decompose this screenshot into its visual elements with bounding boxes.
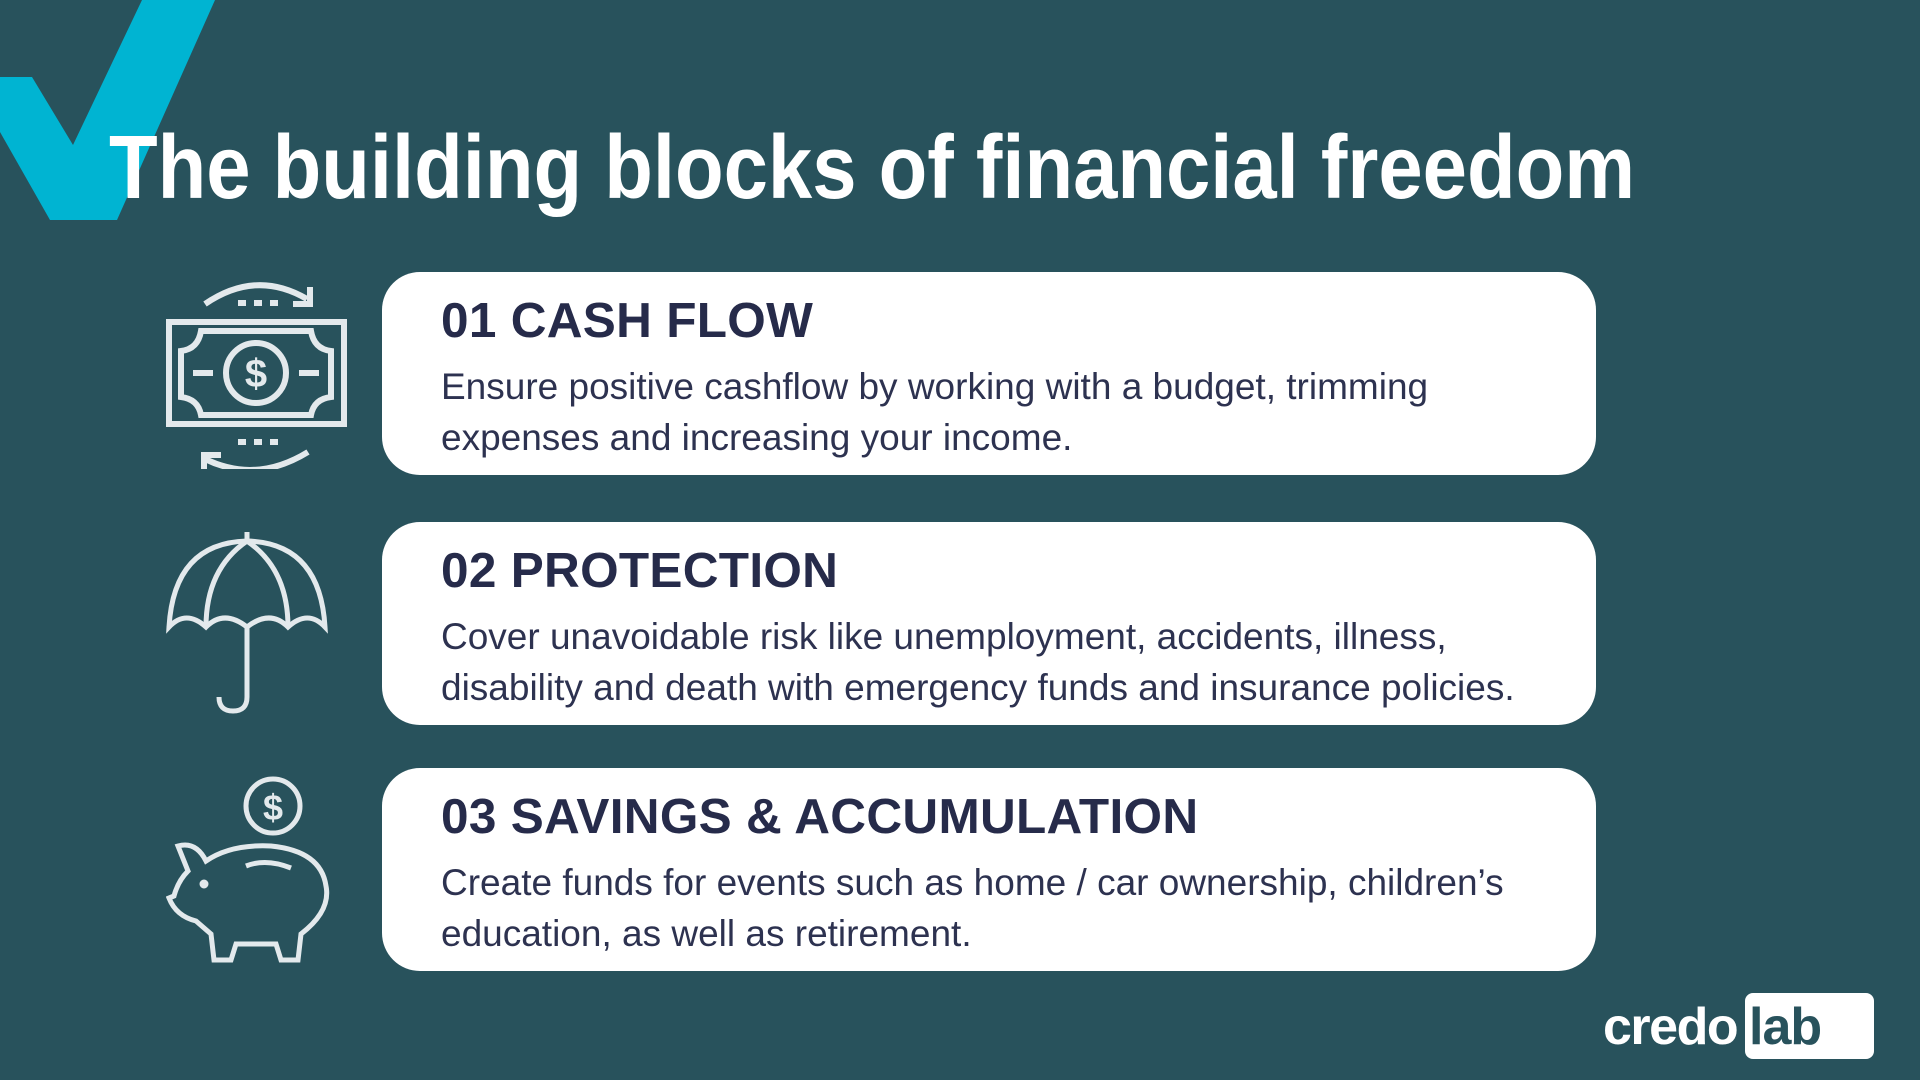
icon: cash flow: $ <box>245 352 267 396</box>
panel: savings <box>382 768 1596 971</box>
text: protection description: disability and death with emergency funds and insurance policies. <box>441 667 1515 708</box>
text: savings description <box>441 862 1504 954</box>
heading: 02 protection: 02 PROTECTION <box>441 543 838 598</box>
text: savings description: education, as well as retirement. <box>441 913 972 954</box>
logo: credolab: credo <box>1603 998 1737 1056</box>
icon: cash flow <box>166 282 347 469</box>
icon: umbrella <box>166 532 328 714</box>
icon: piggy bank: $ <box>263 787 283 828</box>
text: cash flow description: Ensure positive cashflow by working with a budget, trimming <box>441 366 1428 407</box>
heading: 03 savings & accumulation: 03 SAVINGS & ACCUMULATION <box>441 789 1198 844</box>
icon: piggy bank <box>166 776 330 962</box>
checkmark decoration <box>0 0 215 220</box>
text: protection description <box>441 616 1515 708</box>
text: protection description: Cover unavoidable risk like unemployment, accidents, illness, <box>441 616 1447 657</box>
text: cash flow description: expenses and increasing your income. <box>441 417 1072 458</box>
logo: credolab <box>1603 993 1874 1059</box>
text: cash flow description <box>441 366 1428 458</box>
panel: protection <box>382 522 1596 725</box>
text: savings description: Create funds for events such as home / car ownership, children’s <box>441 862 1504 903</box>
panel: cash flow <box>382 272 1596 475</box>
logo: credolab: lab <box>1749 998 1821 1056</box>
heading: 01 cash flow: 01 CASH FLOW <box>441 293 813 348</box>
